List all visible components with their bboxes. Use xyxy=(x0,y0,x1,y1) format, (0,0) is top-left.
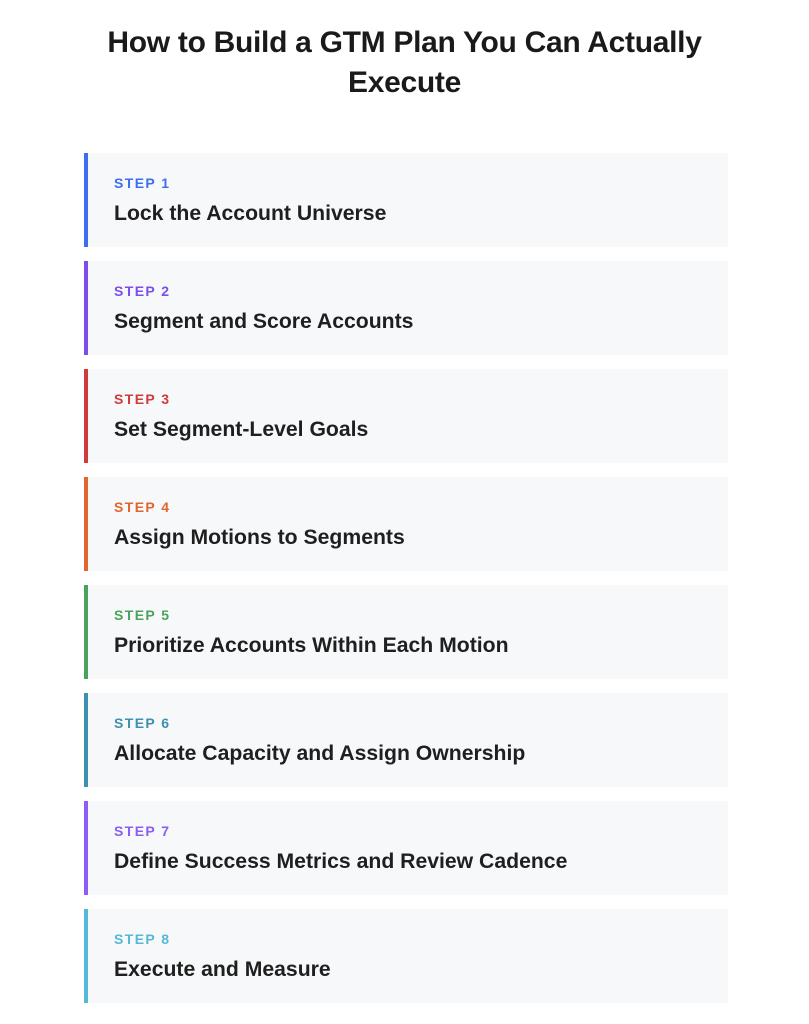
step 2 card: Segment and Score Accounts xyxy=(114,310,413,333)
title: How to Build a GTM Plan You Can Actually xyxy=(107,26,702,59)
step 4 card xyxy=(84,477,728,571)
step 5 card xyxy=(84,585,728,679)
step 5 card: STEP 5 xyxy=(114,607,170,623)
step 6 card: Allocate Capacity and Assign Ownership xyxy=(114,742,525,765)
step 2 card: STEP 2 xyxy=(114,283,170,299)
step 3 card: STEP 3 xyxy=(114,391,170,407)
step 4 card: STEP 4 xyxy=(114,499,170,515)
step 7 card xyxy=(84,801,728,895)
step 5 card: Prioritize Accounts Within Each Motion xyxy=(114,634,509,657)
step 3 card xyxy=(84,369,728,463)
step 1 card xyxy=(84,153,728,247)
step 6 card: STEP 6 xyxy=(114,715,170,731)
title: Execute xyxy=(348,66,461,99)
step 1 card: STEP 1 xyxy=(114,175,170,191)
step 3 card: Set Segment-Level Goals xyxy=(114,418,368,441)
step 7 card: STEP 7 xyxy=(114,823,170,839)
step 6 card xyxy=(84,693,728,787)
step 7 card: Define Success Metrics and Review Cadence xyxy=(114,850,567,873)
step 4 card: Assign Motions to Segments xyxy=(114,526,405,549)
step 2 card xyxy=(84,261,728,355)
step 1 card: Lock the Account Universe xyxy=(114,202,386,225)
step 8 card: Execute and Measure xyxy=(114,958,331,981)
step 8 card xyxy=(84,909,728,1003)
step 8 card: STEP 8 xyxy=(114,931,170,947)
title xyxy=(107,26,702,99)
